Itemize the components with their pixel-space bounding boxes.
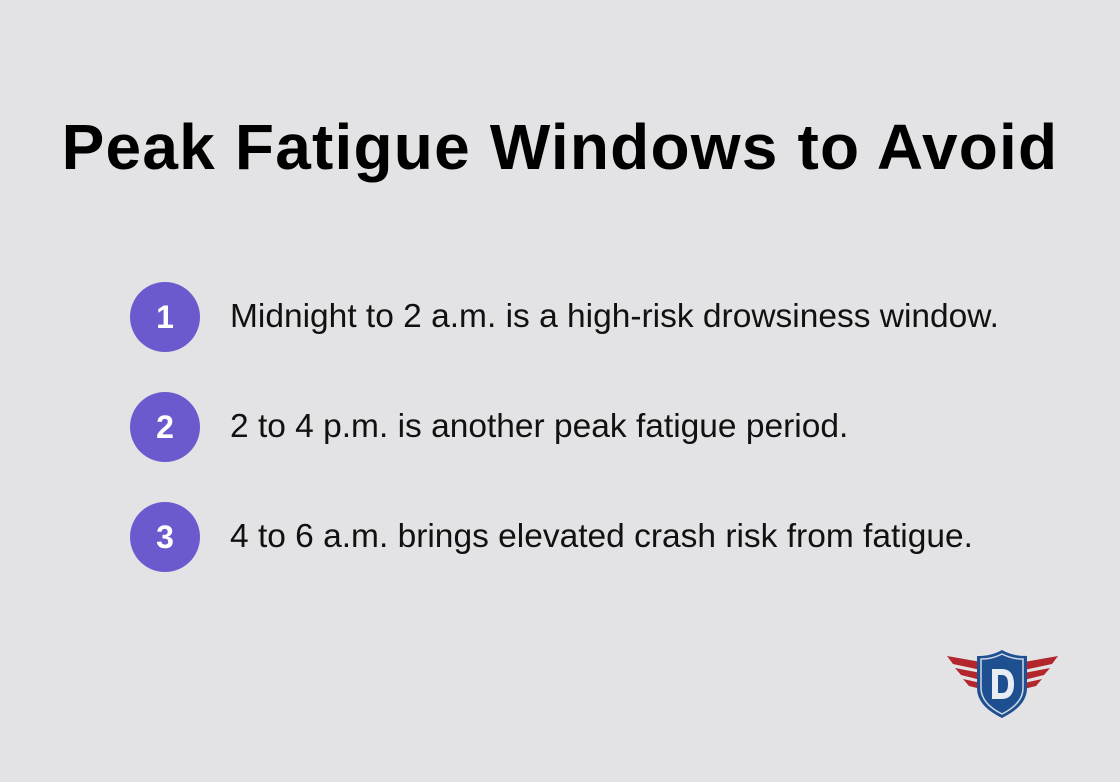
number badge 2 bbox=[130, 392, 200, 462]
text 2: 2 to 4 p.m. is another peak fatigue period. bbox=[230, 408, 848, 445]
item 3 bbox=[130, 502, 973, 572]
number badge 1 bbox=[130, 282, 200, 352]
number badge 2: 2 bbox=[156, 409, 174, 445]
item 1 bbox=[130, 282, 999, 352]
item 2 bbox=[130, 392, 848, 462]
icon: logo shield with wings bbox=[947, 650, 1058, 718]
text 3: 4 to 6 a.m. brings elevated crash risk from fatigue. bbox=[230, 518, 973, 555]
text 1: Midnight to 2 a.m. is a high-risk drowsiness window. bbox=[230, 298, 999, 335]
number badge 3 bbox=[130, 502, 200, 572]
number badge 1: 1 bbox=[156, 299, 174, 335]
title: Peak Fatigue Windows to Avoid bbox=[62, 111, 1058, 183]
number badge 3: 3 bbox=[156, 519, 174, 555]
